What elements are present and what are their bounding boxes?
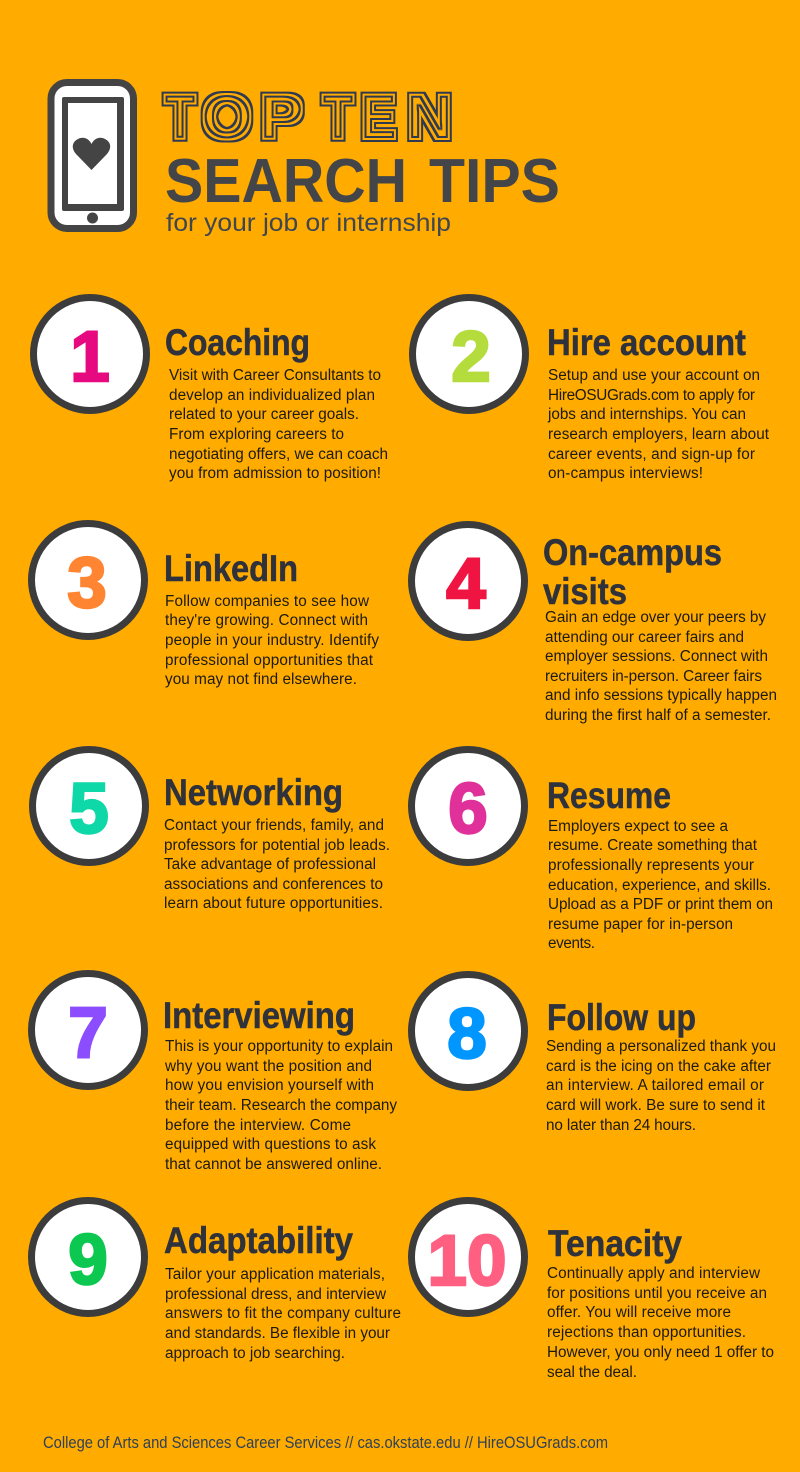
body text: employer sessions. Connect with: [545, 648, 768, 665]
subtitle: for your job or internship: [166, 209, 451, 237]
body text: Take advantage of professional: [164, 856, 376, 873]
number badge 3: [32, 524, 144, 636]
heading: adaptability: Adaptability: [164, 1220, 353, 1261]
number badge 8: [412, 974, 524, 1088]
body text: seal the deal.: [547, 1364, 637, 1381]
number badge 6: [412, 750, 524, 862]
heading: coaching: Coaching: [165, 322, 310, 363]
body text: HireOSUGrads.com to apply for: [548, 387, 755, 404]
number badge 3: 3: [67, 544, 107, 623]
title: top ten: N: [407, 83, 452, 151]
body text: [546, 1038, 776, 1134]
body text: that cannot be answered online.: [165, 1156, 382, 1173]
body text: Employers expect to see a: [548, 818, 728, 835]
body text: negotiating offers, we can coach: [169, 446, 388, 463]
body text: [545, 609, 777, 724]
body text: [547, 1265, 774, 1381]
body text: develop an individualized plan: [169, 387, 375, 404]
number badge 7: 7: [68, 994, 108, 1073]
body text: card is the icing on the cake after: [546, 1058, 771, 1075]
heading: on-campus visits: visits: [543, 571, 627, 612]
title: search tips: TIPS: [429, 147, 560, 216]
number badge 5: [32, 750, 146, 862]
body text: professional opportunities that: [165, 652, 374, 669]
body text: Setup and use your account on: [548, 367, 760, 384]
number badge 5: 5: [69, 770, 109, 849]
title: top ten: T: [165, 83, 195, 151]
body text: offer. You will receive more: [547, 1304, 731, 1321]
body text: jobs and internships. You can: [547, 406, 746, 423]
body text: Continually apply and interview: [547, 1265, 761, 1282]
body text: how you envision yourself with: [165, 1077, 374, 1094]
number badge 6: 6: [448, 770, 488, 849]
body text: Tailor your application materials,: [165, 1266, 385, 1283]
tip 2: hire account: [412, 298, 770, 482]
body text: approach to job searching.: [165, 1345, 345, 1362]
body text: resume. Create something that: [548, 837, 758, 854]
body text: an interview. A tailored email or: [546, 1077, 764, 1094]
body text: answers to fit the company culture: [165, 1305, 401, 1322]
body text: they're growing. Connect with: [165, 612, 368, 629]
heading: follow up: Follow up: [547, 997, 696, 1038]
tip 4: on-campus visits: [412, 524, 777, 724]
body text: and standards. Be flexible in your: [165, 1325, 390, 1342]
title: top ten: T: [323, 83, 353, 151]
footer: College of Arts and Sciences Career Services // cas.okstate.edu // HireOSUGrads.com: [43, 1433, 608, 1452]
number badge 9: 9: [68, 1221, 108, 1300]
number badge 10: [412, 1200, 524, 1314]
body text: [164, 817, 390, 912]
body text: [165, 1266, 401, 1362]
heading: linkedin: LinkedIn: [164, 548, 298, 589]
number badge 8: 8: [447, 995, 487, 1074]
body text: [164, 1038, 397, 1173]
body text: before the interview. Come: [165, 1117, 351, 1134]
number badge 1: 1: [70, 318, 110, 397]
body text: Visit with Career Consultants to: [169, 367, 381, 384]
body text: people in your industry. Identify: [165, 632, 379, 649]
title: top ten: E: [361, 83, 396, 151]
number badge 4: [412, 524, 524, 638]
title: top ten: P: [260, 83, 303, 151]
body text: why you want the position and: [164, 1058, 372, 1075]
tip 7: interviewing: [32, 974, 397, 1173]
body text: From exploring careers to: [169, 426, 344, 443]
number badge 4: 4: [446, 545, 486, 624]
body text: on-campus interviews!: [548, 465, 703, 482]
tip 8: follow up: [412, 974, 776, 1134]
tip 3: linkedin: [32, 524, 379, 688]
body text: card will work. Be sure to send it: [546, 1097, 766, 1114]
title: top ten: O: [202, 83, 252, 151]
title: search tips: SEARCH: [165, 147, 407, 216]
body text: education, experience, and skills.: [548, 877, 771, 894]
number badge 2: [412, 298, 526, 410]
heading: hire account: Hire account: [547, 322, 746, 363]
number badge 1: [34, 298, 146, 410]
title: search tips: [165, 147, 560, 216]
body text: you may not find elsewhere.: [165, 671, 357, 688]
body text: during the first half of a semester.: [545, 707, 771, 724]
heading: networking: Networking: [164, 772, 343, 813]
body text: Follow companies to see how: [165, 593, 370, 610]
body text: Contact your friends, family, and: [164, 817, 384, 834]
body text: you from admission to position!: [169, 465, 381, 482]
tip 6: resume: [412, 750, 773, 952]
body text: professional dress, and interview: [165, 1286, 387, 1303]
body text: equipped with questions to ask: [165, 1136, 376, 1153]
tip 1: coaching: [34, 298, 388, 482]
heading: on-campus visits: On-campus: [543, 532, 722, 573]
title: top ten: [165, 83, 452, 151]
number badge 7: [32, 974, 144, 1086]
tip 10: tenacity: [412, 1200, 774, 1381]
heading: on-campus visits: [543, 532, 722, 612]
body text: Sending a personalized thank you: [546, 1038, 776, 1055]
body text: related to your career goals.: [169, 406, 359, 423]
icon: smartphone with heart: [51, 82, 134, 228]
number badge 2: 2: [451, 318, 491, 397]
number badge 9: [32, 1200, 144, 1314]
heading: resume: Resume: [547, 775, 671, 816]
body text: events.: [548, 935, 595, 952]
body text: learn about future opportunities.: [164, 895, 383, 912]
body text: their team. Research the company: [165, 1097, 397, 1114]
body text: no later than 24 hours.: [546, 1117, 696, 1134]
body text: professionally represents your: [548, 857, 754, 874]
heading: interviewing: Interviewing: [163, 995, 355, 1036]
body text: attending our career fairs and: [545, 629, 744, 646]
body text: recruiters in-person. Career fairs: [545, 668, 762, 685]
body text: and info sessions typically happen: [545, 687, 777, 704]
body text: Gain an edge over your peers by: [545, 609, 766, 626]
body text: associations and conferences to: [164, 876, 383, 893]
body text: Upload as a PDF or print them on: [548, 896, 773, 913]
body text: [165, 593, 379, 688]
body text: rejections than opportunities.: [547, 1324, 746, 1341]
body text: resume paper for in-person: [548, 916, 733, 933]
body text: [547, 367, 770, 482]
body text: career events, and sign-up for: [548, 446, 755, 463]
body text: for positions until you receive an: [547, 1285, 767, 1302]
tip 9: adaptability: [32, 1200, 401, 1362]
body text: professors for potential job leads.: [164, 837, 390, 854]
body text: [548, 818, 773, 952]
body text: [169, 367, 388, 482]
body text: research employers, learn about: [548, 426, 770, 443]
tip 5: networking: [32, 750, 390, 912]
heading: tenacity: Tenacity: [548, 1223, 682, 1264]
body text: However, you only need 1 offer to: [547, 1344, 774, 1361]
number badge 10: 10: [428, 1222, 506, 1301]
body text: This is your opportunity to explain: [165, 1038, 393, 1055]
